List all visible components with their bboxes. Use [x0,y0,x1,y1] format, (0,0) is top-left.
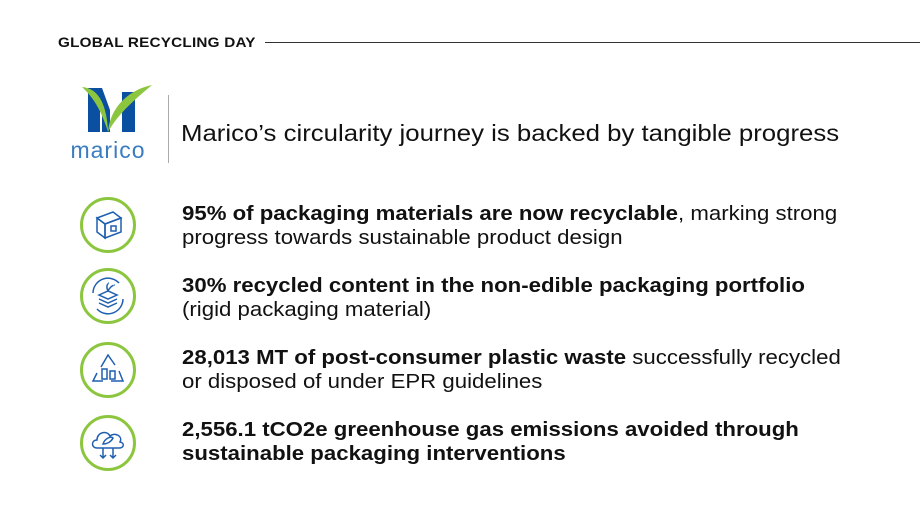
item 2: (rigid packaging material) [182,299,431,321]
item 4: 2,556.1 tCO2e greenhouse gas emissions avoided through [182,419,799,441]
icon: layers [80,268,136,324]
logo: marico [70,137,146,163]
icon: recycle triangle [80,342,136,398]
icon: cloud leaf [80,415,136,471]
subtitle: Marico’s circularity journey is backed by tangible progress [181,120,839,146]
item 3 [182,347,841,393]
item 1: 95% of packaging materials are now recyclable, marking strong [182,203,837,225]
item 3: or disposed of under EPR guidelines [182,371,542,393]
item 1: progress towards sustainable product design [182,227,623,249]
item 3: 28,013 MT of post-consumer plastic waste successfully recycled [182,347,841,369]
item 2 [182,275,805,321]
item 1 [182,203,837,249]
header label: GLOBAL RECYCLING DAY [58,34,256,50]
item 2: 30% recycled content in the non-edible packaging portfolio [182,275,805,297]
item 4 [182,419,799,465]
divider [168,95,169,163]
logo [70,85,152,163]
icon: box [80,197,136,253]
header rule [265,42,920,43]
item 4: sustainable packaging interventions [182,443,566,465]
